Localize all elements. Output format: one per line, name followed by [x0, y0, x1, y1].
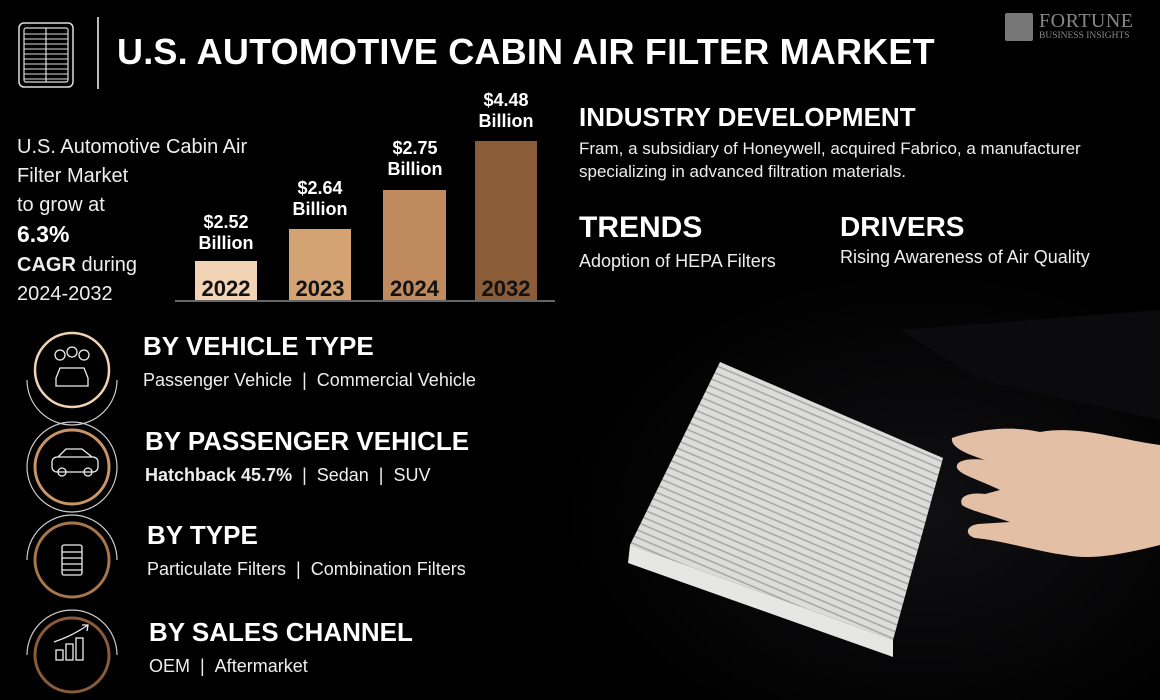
CAGR text: to grow at: [17, 194, 105, 216]
bar chart: 2022: [202, 276, 250, 301]
bar chart: $2.75: [392, 138, 438, 158]
drivers: DRIVERS: [840, 211, 964, 242]
segment: passenger vehicle: [145, 426, 469, 485]
segment: vehicle type: [143, 331, 476, 390]
CAGR text: [17, 136, 247, 305]
segment icons: [26, 332, 118, 694]
CAGR text: 6.3%: [17, 221, 69, 247]
segment: type: Particulate Filters | Combination Filters: [147, 559, 466, 579]
CAGR text: CAGR during: [17, 254, 137, 276]
trends: [579, 211, 776, 271]
title: U.S. AUTOMOTIVE CABIN AIR FILTER MARKET: [117, 31, 935, 72]
background photo: filter in hand: [628, 310, 1160, 657]
logo: [1005, 10, 1134, 41]
industry development: [579, 102, 1081, 181]
bar chart: $2.64: [297, 178, 343, 198]
industry development: INDUSTRY DEVELOPMENT: [579, 102, 916, 132]
CAGR text: Filter Market: [17, 165, 128, 187]
header icon: filter: [18, 22, 74, 88]
bar chart: Billion: [478, 111, 534, 131]
bar chart: $4.48: [483, 90, 529, 110]
bar chart: 2024: [390, 276, 439, 301]
segment: passenger vehicle: Hatchback 45.7% | Sedan | SUV: [145, 465, 430, 485]
logo: FORTUNE: [1039, 10, 1134, 32]
drivers: Rising Awareness of Air Quality: [840, 247, 1090, 267]
bar chart: [175, 90, 555, 302]
trends: TRENDS: [579, 211, 702, 244]
drivers: [840, 211, 1090, 267]
segment: passenger vehicle: BY PASSENGER VEHICLE: [145, 426, 469, 456]
segment: type: BY TYPE: [147, 520, 258, 550]
segment: type: [147, 520, 466, 579]
CAGR text: U.S. Automotive Cabin Air: [17, 136, 247, 158]
bar chart: 2032: [482, 276, 530, 301]
industry development: Fram, a subsidiary of Honeywell, acquired Fabrico, a manufacturer specializing in advanced filtration materials.: [579, 139, 1081, 181]
bar chart: $2.52: [203, 212, 249, 232]
segment: vehicle type: BY VEHICLE TYPE: [143, 331, 374, 361]
bar chart: Billion: [292, 199, 348, 219]
segment: sales channel: BY SALES CHANNEL: [149, 617, 413, 647]
bar chart: 2023: [296, 276, 344, 301]
segment: vehicle type: Passenger Vehicle | Commercial Vehicle: [143, 370, 476, 390]
bar chart: Billion: [198, 233, 254, 253]
bar chart: Billion: [388, 159, 442, 179]
segment: sales channel: [149, 617, 413, 676]
logo: BUSINESS INSIGHTS: [1039, 31, 1130, 41]
segment: sales channel: OEM | Aftermarket: [149, 656, 308, 676]
trends: Adoption of HEPA Filters: [579, 251, 776, 271]
CAGR text: 2024-2032: [17, 283, 113, 305]
